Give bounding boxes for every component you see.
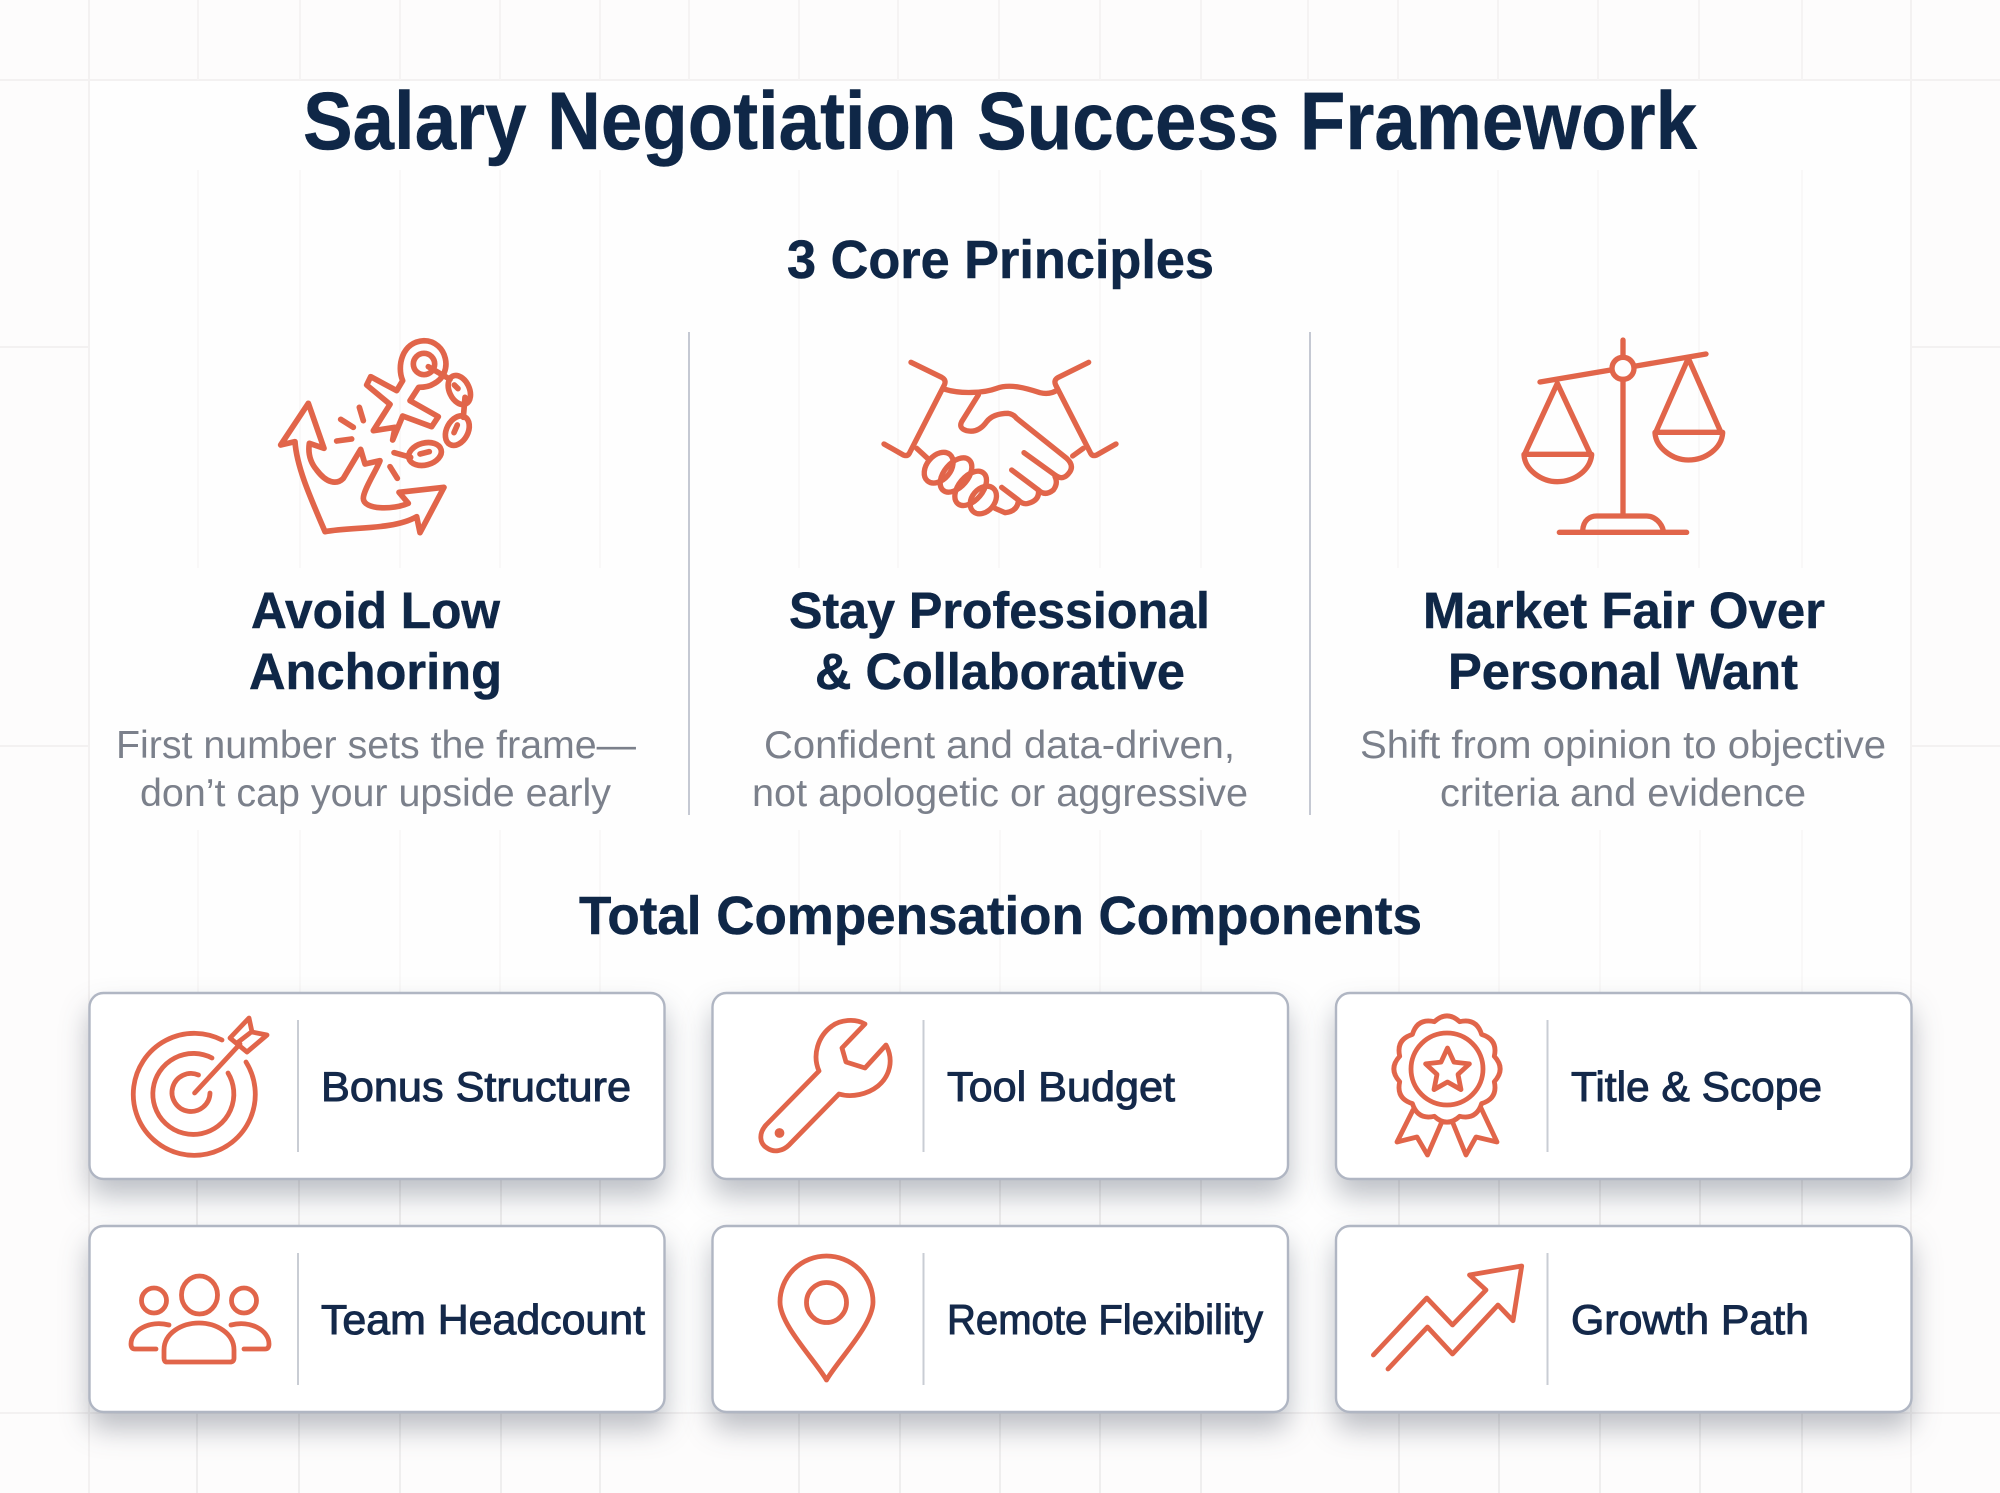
icon: wrench <box>761 1020 890 1151</box>
title: Salary Negotiation Success Framework <box>303 76 1697 167</box>
card: Remote Flexibility <box>712 1226 1288 1412</box>
heading: Avoid Low Anchoring: Anchoring <box>249 643 502 700</box>
panel: Avoid Low Anchoring <box>116 341 636 815</box>
card: Bonus Structure <box>90 993 664 1179</box>
description: Stay Professional & Collaborative: not apologetic or aggressive <box>752 772 1248 815</box>
description: Avoid Low Anchoring <box>116 724 636 815</box>
heading: Market Fair Over Personal Want: Market Fair Over <box>1423 582 1825 639</box>
label: Team Headcount: Team Headcount <box>321 1296 645 1343</box>
panel: Stay Professional & Collaborative <box>752 362 1248 815</box>
icon: team of three people <box>131 1276 269 1362</box>
heading: Avoid Low Anchoring: Avoid Low <box>251 582 500 639</box>
icon: balance scales <box>1524 340 1723 532</box>
icon: broken anchor with chain <box>281 341 475 533</box>
description: Stay Professional & Collaborative: Confident and data-driven, <box>764 724 1235 767</box>
heading: 3 Core Principles: 3 Core Principles <box>787 230 1214 290</box>
card: Tool Budget <box>712 993 1288 1179</box>
icon: rising growth arrow <box>1373 1266 1522 1369</box>
heading: Stay Professional & Collaborative: Stay Professional <box>789 582 1210 639</box>
panel: Market Fair Over Personal Want <box>1360 340 1886 815</box>
icon: location pin <box>780 1256 873 1380</box>
heading: Market Fair Over Personal Want <box>1423 582 1825 700</box>
heading: Avoid Low Anchoring <box>249 582 502 700</box>
description: Market Fair Over Personal Want: criteria and evidence <box>1440 772 1806 815</box>
label: Remote Flexibility: Remote Flexibility <box>947 1296 1263 1343</box>
icon: award badge <box>1394 1016 1500 1155</box>
label: Tool Budget: Tool Budget <box>947 1063 1175 1110</box>
card: Title & Scope <box>1336 993 1912 1179</box>
heading: Stay Professional & Collaborative <box>789 582 1210 700</box>
description: Market Fair Over Personal Want: Shift from opinion to objective <box>1360 724 1886 767</box>
heading: Stay Professional & Collaborative: & Collaborative <box>815 643 1185 700</box>
icon: target with arrow <box>133 1018 267 1155</box>
label: Growth Path: Growth Path <box>1571 1296 1809 1343</box>
label: Bonus Structure: Bonus Structure <box>321 1063 631 1110</box>
card: Growth Path <box>1336 1226 1912 1412</box>
icon: handshake <box>884 362 1116 519</box>
description: Avoid Low Anchoring: don’t cap your upside early <box>140 772 611 815</box>
label: Title & Scope: Title & Scope <box>1571 1063 1822 1110</box>
description: Avoid Low Anchoring: First number sets the frame— <box>116 724 636 767</box>
heading: Market Fair Over Personal Want: Personal Want <box>1448 643 1798 700</box>
card: Team Headcount <box>90 1226 664 1412</box>
description: Market Fair Over Personal Want <box>1360 724 1886 815</box>
heading: Total Compensation Components: Total Compensation Components <box>579 886 1422 946</box>
description: Stay Professional & Collaborative <box>752 724 1248 815</box>
